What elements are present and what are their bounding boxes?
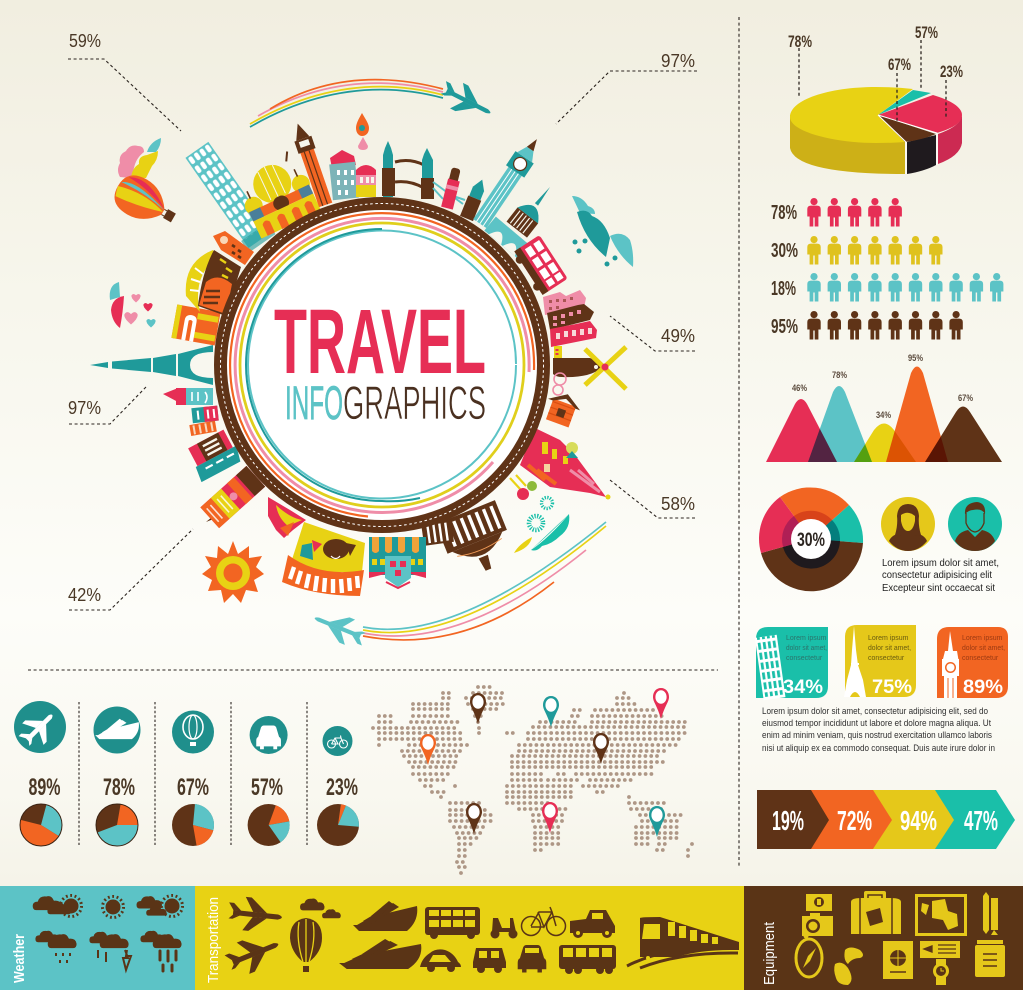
callout 97% left: 97% [68,398,101,418]
road ring [220,204,544,526]
crimson pie side [938,115,962,164]
chart: arrow percentage band: 94% [900,805,937,836]
panel: equipment [744,886,1023,990]
callouts: main percent labels [68,31,697,610]
icon: hot air balloon [290,918,322,972]
top plane with rainbow trail [250,76,497,127]
pie 23% [317,804,359,846]
pin: crimson russia [653,688,669,719]
callout 58% [610,480,695,518]
pie 89% [20,804,62,846]
percent 57%: 57% [251,774,283,801]
icon: suitcase [851,891,901,934]
percent 78%: 78% [103,774,135,801]
pie label 57%: 57% [915,23,938,42]
map pins [420,688,669,837]
icon: balloon badge [172,710,214,754]
landmark: orange arched building [171,304,221,346]
icon: sun [202,541,264,603]
card: Big Ben 89% [937,627,1008,698]
landmark: orange clock tower [289,121,334,208]
callout 97% top [556,51,697,124]
panel: transport share stats [14,701,359,846]
icon: cruise ship [339,939,421,969]
icon: vintage car [570,910,615,938]
percent 89%: 89% [28,774,60,801]
callout 42%: 42% [68,585,101,605]
landmark: city buildings [329,150,376,200]
pin: orange america [420,734,436,765]
panel: central globe ring [220,204,544,526]
icon: world map [915,894,967,936]
card: Eiffel 75%: 75% [872,677,912,698]
landmark: colosseum [186,250,241,316]
row 78% [771,198,902,226]
card: Big Ben 89%: consectetur [962,655,999,662]
pie label 67%: 67% [888,55,911,74]
pin: crimson africa [542,802,558,833]
card: Eiffel 75% [844,625,916,698]
stat dividers [79,702,307,845]
pie 57% [248,804,290,846]
row 18% [771,273,1003,302]
icon: ship [353,901,417,931]
callout 97% left [68,387,146,424]
pie sector separators [878,115,937,174]
row 95%: 95% [771,316,798,338]
card: Eiffel 75%: consectetur [868,655,905,662]
percent 23%: 23% [326,774,358,801]
teal sector [878,90,931,115]
icon: pencils [983,892,998,935]
landmark: small trees [510,475,537,500]
card: Pisa 34%: 34% [783,677,823,698]
row 18%: 18% [771,278,796,300]
landmark: roman column monument [421,500,518,582]
subtitle [285,376,486,429]
weather label: Weather [11,934,28,983]
row 78%: 78% [771,202,797,224]
card: Eiffel 75%: dolor sit amet, [868,645,911,652]
card: Big Ben 89%: 89% [963,677,1003,698]
chart: 3d pie [788,23,963,174]
chart: arrow percentage band: 72% [837,805,872,836]
landmark: St Paul's dome and arch bridge [484,179,560,259]
text: avatar caption [882,558,999,594]
yellow pie side [790,115,905,174]
panel: transportation [195,886,744,990]
text: avatar caption: Excepteur sint occaecat sit [882,583,995,594]
callout 42% [68,529,193,610]
yellow ring [240,223,524,507]
title [274,291,486,429]
landmark: bullring with bull and matador [282,522,365,596]
light teal ring [248,230,516,498]
pin: teal europe [543,696,559,727]
callout 97% top: 97% [661,51,695,71]
landmark: red double decker bus [511,235,568,297]
landmark: red castle with domes [520,428,610,500]
text: lorem paragraph [762,706,995,754]
peak labels: 34% [876,410,891,420]
yellow sector [790,87,913,143]
icon: rain clouds [572,196,633,267]
icon: teardrop location marks [356,113,369,150]
icon: scooter [490,918,518,938]
icon: clouds [300,898,341,918]
landmark: leaning tower of Pisa [184,141,275,252]
icon: second plane [222,928,285,980]
row 30%: 30% [771,240,798,262]
icon: man avatar [948,497,1002,551]
peak labels: 95% [908,353,923,363]
icon: bicycle [522,907,566,936]
dark teal ring [246,229,420,501]
peak labels: 67% [958,393,973,403]
chart: arrow percentage band: 47% [964,805,998,836]
peak 78% [808,386,872,462]
callout 59%: 59% [69,31,101,51]
icon: wrist watch [933,959,949,985]
icon: flip flops [834,948,863,985]
subtitle: GRAPHICS [343,376,486,429]
chart: dotted world map [373,687,694,873]
pink ring [235,218,529,512]
pin: brown south america [466,803,482,834]
peak 46% [766,399,837,462]
black pie side [907,135,936,174]
card: Pisa 34% [755,627,828,700]
pie 78% [96,804,138,846]
icon: minibus [559,945,616,974]
pin: brown asia [593,733,609,764]
icon: bike badge [322,726,352,756]
icon: passport [883,941,913,979]
landmark: crimson and teal building [185,428,244,482]
chart: mountain peaks [766,353,1002,462]
panel: weather [0,886,195,990]
row 30% [771,236,942,264]
landmark: row of dutch houses [543,290,597,347]
icon: money [806,894,832,911]
callout 49% [610,316,695,351]
card: Eiffel 75%: Lorem ipsum [868,635,909,642]
inner white disc [222,205,542,525]
chart: arrow percentage band [757,790,1015,849]
icon: front view car [518,945,546,972]
icon: double decker bus [425,907,480,939]
icon: plane badge [14,701,66,753]
text: avatar caption: consectetur adipisicing elit [882,570,992,581]
subtitle: INFO [285,376,343,429]
icon: car badge [250,716,288,754]
icon: beetle car [420,949,461,972]
text: lorem paragraph: Lorem ipsum dolor sit amet, consectetur adipisicing elit, sed do [762,706,988,717]
landmark: left side small facades [163,388,219,436]
peak 34% [854,424,916,462]
callout 49%: 49% [661,326,695,346]
icon: pink bicycle ornament [553,373,566,395]
chart: arrow percentage band: 19% [772,805,804,836]
landmark: teal house at the bottom [369,537,426,588]
icon: notebook jar [975,940,1005,977]
card: Big Ben 89%: Lorem ipsum [962,635,1003,642]
bottom plane with rainbow trail [310,522,606,651]
chart: donut 30% [759,487,863,591]
callout 59% [68,31,181,131]
icon: plane ticket [920,941,960,958]
equipment label: Equipment [761,921,778,985]
pin: teal australia [649,806,665,837]
title: TRAVEL [274,291,486,393]
peak 67% [925,406,1002,462]
landmark: domed church [231,148,323,240]
pie 67% [172,804,214,846]
chart: people pictogram [771,198,1003,340]
landmark: lipstick shaped tower [441,167,463,210]
pie label 23%: 23% [940,62,963,81]
landmark: small tower [460,177,489,221]
icon: snowflakes [529,498,552,530]
icon: mint and yellow clouds [514,514,569,553]
peak 95% [886,366,948,462]
divider lines [28,17,739,868]
landmark: tower bridge [382,141,465,204]
percent 67%: 67% [177,774,209,801]
transportation label: Transportation [205,897,222,983]
landmark: lower left houses [200,466,265,528]
icon: train [627,917,739,968]
icon: camera [802,913,833,936]
orange ring [230,213,534,517]
card: Pisa 34%: dolor sit amet, [786,645,827,652]
callout 58%: 58% [661,494,695,514]
landmark: Eiffel tower [90,345,213,385]
crimson sector [878,95,962,133]
icon: woman avatar [881,497,935,551]
icon: jeep [473,948,506,973]
pie leader lines [799,40,946,123]
icon: compass [796,934,822,977]
peak labels [792,353,973,420]
card: Pisa 34%: consectetur [786,655,823,662]
icon: hearts and clouds [110,282,156,328]
landmark: colourful butterfly rooftop [268,497,306,538]
text: lorem paragraph: eiusmod tempor incididunt ut labore et dolore magna aliqua. Ut [762,718,991,729]
pin: brown north [470,693,486,724]
icon: plane [226,895,284,934]
road centre dashes [220,204,544,526]
chart: donut 30%: 30% [797,530,825,551]
peak labels: 78% [832,370,847,380]
text: avatar caption: Lorem ipsum dolor sit amet, [882,558,999,569]
peak labels: 46% [792,383,807,393]
landmark: log cabin [541,388,584,429]
card: Big Ben 89%: dolor sit amet, [962,645,1005,652]
icon: hot air balloon with clouds [108,138,183,235]
weather icons [33,896,183,971]
landmark: windmill [553,346,626,389]
card: Pisa 34%: Lorem ipsum [786,635,827,642]
pie label 78%: 78% [788,32,812,51]
brown sector [878,115,936,142]
landmark: Big Ben [471,133,546,230]
row 95% [771,311,963,340]
landmark: orange pointed house [213,231,254,265]
icon: ship badge [94,706,140,754]
